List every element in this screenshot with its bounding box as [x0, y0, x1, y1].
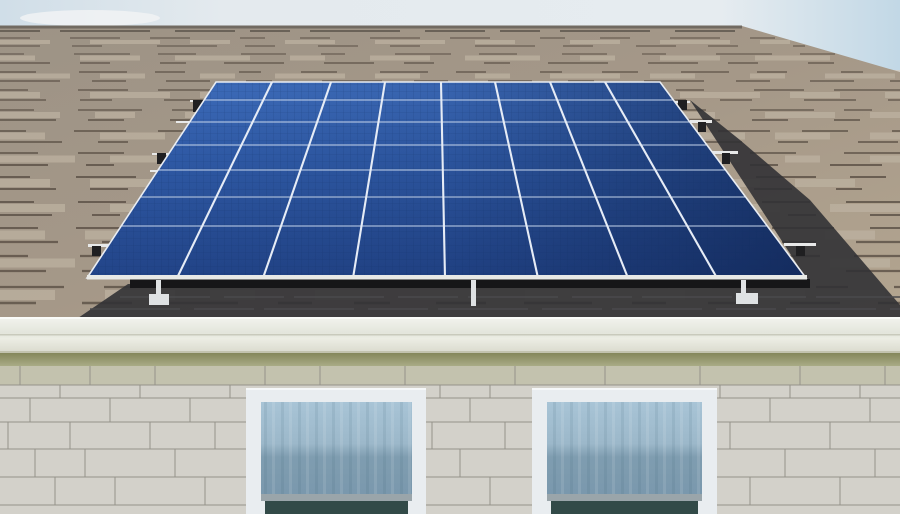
right window	[532, 388, 717, 514]
gutter	[0, 317, 900, 353]
panel surface	[87, 82, 806, 278]
mounting clamps	[92, 100, 805, 256]
left window	[246, 388, 426, 514]
column lines	[177, 82, 717, 278]
panel shadow on roof	[78, 100, 900, 320]
solar panel array	[87, 82, 816, 306]
light shingle faces	[0, 42, 900, 295]
mounting feet	[149, 280, 758, 306]
mounting rail stubs	[88, 100, 816, 247]
brick wall	[0, 366, 900, 514]
panel frame	[87, 82, 806, 278]
sky	[0, 0, 900, 70]
soffit	[0, 353, 900, 366]
ridge line	[0, 26, 742, 28]
roof shingles	[0, 26, 900, 320]
row lines	[121, 100, 767, 226]
clouds	[20, 10, 160, 26]
